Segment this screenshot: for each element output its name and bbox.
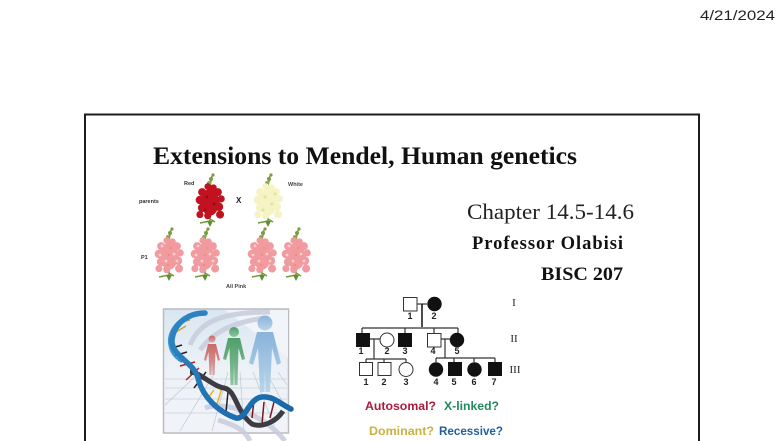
pink flower 4 (282, 227, 311, 281)
professor name: Professor Olabisi (472, 234, 623, 254)
pedigree connecting lines (362, 304, 495, 362)
ghost helix (190, 312, 285, 441)
individual numbers: 7 (491, 377, 497, 387)
individual numbers: 1 (358, 346, 364, 356)
label: All Pink: All Pink (226, 284, 247, 290)
pedigree chart (356, 297, 521, 438)
DNA dark strand (190, 372, 283, 425)
chapter text: Chapter 14.5-14.6 (467, 199, 634, 224)
individual numbers: 2 (381, 377, 387, 387)
figure: red person (204, 336, 220, 375)
white flower (254, 173, 283, 227)
title: Extensions to Mendel, Human genetics (153, 143, 577, 170)
generation numerals (510, 297, 521, 376)
DNA blue strand (172, 313, 291, 418)
red flower (196, 173, 225, 227)
question: Autosomal: Autosomal? (365, 399, 436, 413)
label: parents: parents (139, 199, 159, 205)
individual numbers (358, 311, 497, 387)
pink flower 1 (155, 227, 184, 281)
question: Dominant: Dominant? (369, 424, 434, 438)
slide panel (85, 114, 699, 441)
figure: green person (223, 327, 245, 385)
backdrop highlight (225, 310, 288, 358)
pink flower 2 (191, 227, 220, 281)
question: Recessive: Recessive? (439, 424, 503, 438)
pink flower 3 (248, 227, 277, 281)
individual numbers: 3 (402, 346, 408, 356)
label: White: White (288, 182, 303, 188)
individual numbers: 3 (403, 377, 409, 387)
generation numerals: II (510, 333, 518, 345)
individual numbers: 5 (451, 377, 457, 387)
generation numerals: III (510, 364, 521, 376)
course code: BISC 207 (541, 265, 623, 285)
individual numbers: 5 (454, 346, 460, 356)
generation numerals: I (512, 297, 516, 309)
generation II (356, 333, 464, 347)
label: Red: Red (184, 181, 194, 187)
individual numbers: 4 (430, 346, 436, 356)
floor grid (165, 372, 287, 431)
individual numbers: 1 (363, 377, 369, 387)
DNA and human figures image (164, 309, 291, 441)
DNA second strand (169, 312, 198, 362)
label: P1: P1 (141, 255, 148, 261)
individual numbers: 1 (407, 311, 413, 321)
generation I (404, 297, 442, 311)
figure: blue person (249, 316, 281, 392)
generation III (360, 362, 502, 377)
individual numbers: 4 (433, 377, 439, 387)
cross symbol: X (236, 196, 242, 205)
image frame (164, 309, 288, 433)
question: X-linked: X-linked? (444, 399, 499, 413)
DNA rungs (172, 320, 274, 424)
date: 4/21/2024 (700, 7, 775, 23)
snapdragon cross diagram (139, 173, 311, 290)
individual numbers: 6 (471, 377, 477, 387)
individual numbers: 2 (431, 311, 437, 321)
individual numbers: 2 (384, 346, 390, 356)
